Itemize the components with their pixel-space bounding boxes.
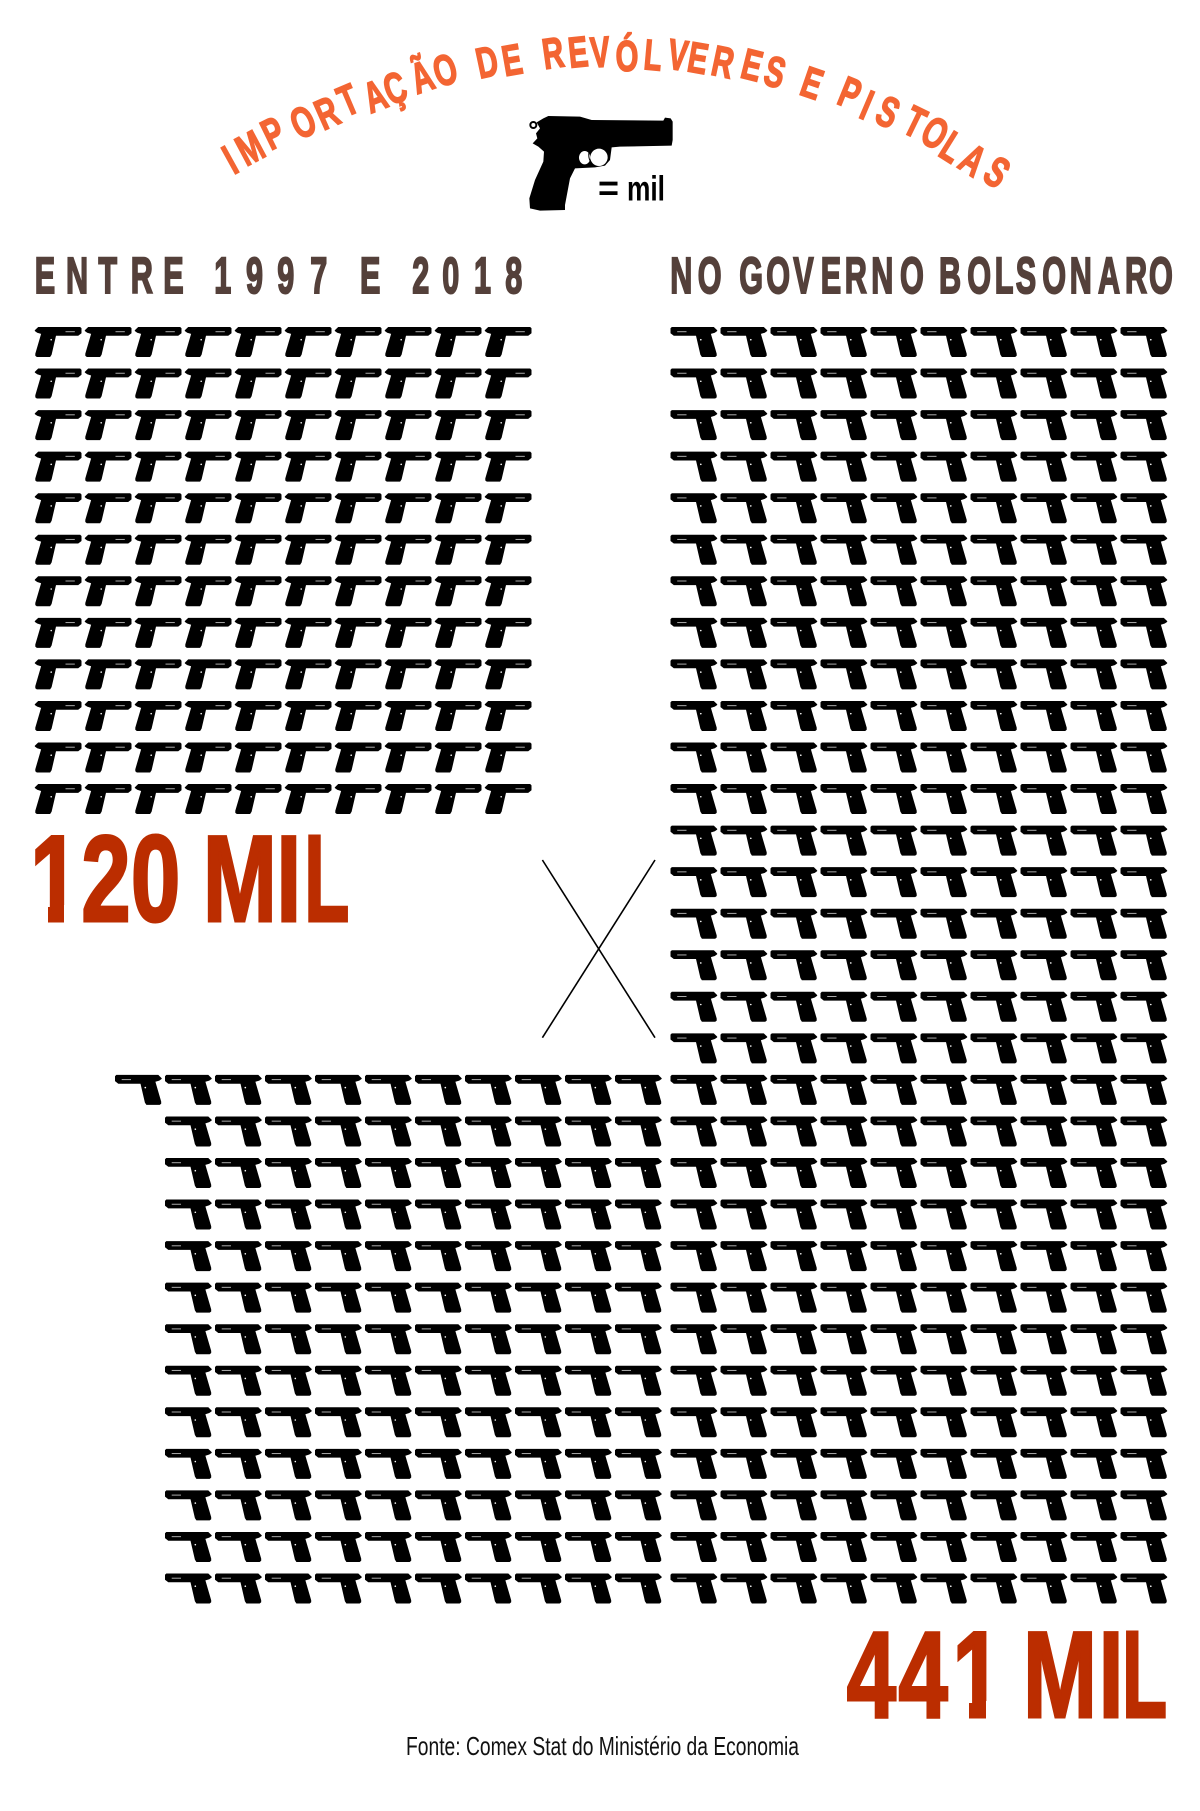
- title: curved heading: I: [854, 82, 880, 129]
- title: curved heading: I: [215, 137, 245, 183]
- title: curved heading: A: [357, 70, 394, 122]
- title: curved heading: R: [708, 37, 738, 88]
- title: curved heading: A: [951, 134, 995, 186]
- title: curved heading: E: [684, 33, 712, 83]
- title: curved heading: T: [896, 97, 934, 148]
- pictogram: 441 mil guns, Bolsonaro government, right column: [670, 327, 1167, 1604]
- title: curved heading: [215, 27, 1018, 197]
- title: curved heading: R: [308, 87, 346, 139]
- title: curved heading: Ã: [404, 50, 440, 103]
- title: curved heading: L: [642, 31, 664, 80]
- value: 441 mil: [847, 1630, 1166, 1719]
- icon: pistol legend: [529, 116, 673, 211]
- title: curved heading: R: [539, 28, 567, 78]
- title: curved heading: Ç: [377, 62, 413, 114]
- title: curved heading: Ó: [615, 31, 639, 80]
- title: curved heading: D: [472, 37, 502, 88]
- legend label: = mil: mil: [627, 170, 665, 208]
- value: 120 mil: L: [304, 811, 349, 948]
- value: 441 mil: MI: [1023, 1606, 1123, 1743]
- value: 120 mil: [35, 834, 348, 924]
- title: curved heading: E: [737, 40, 767, 91]
- title: curved heading: V: [589, 28, 612, 77]
- title: curved heading: E: [795, 57, 829, 109]
- value: 441 mil: 44: [847, 1606, 948, 1743]
- title: curved heading: S: [975, 147, 1018, 197]
- legend label: = mil: [598, 169, 665, 208]
- source note: Fonte: Comex Stat do Ministério da Economia: [406, 1731, 799, 1761]
- title: curved heading: S: [759, 46, 791, 98]
- title: curved heading: O: [283, 96, 324, 149]
- title: curved heading: P: [254, 107, 292, 159]
- value: 120 mil: 20MI: [81, 810, 301, 947]
- title: curved heading: V: [665, 30, 691, 80]
- heading: no governo bolsonaro: NOGOVERNOBOLSONARO: [670, 247, 1173, 304]
- heading: entre 1997 e 2018: ENTRE1997E2018: [35, 247, 522, 304]
- legend label: = mil: =: [598, 169, 619, 208]
- title: curved heading: O: [427, 44, 463, 96]
- title: curved heading: E: [498, 35, 526, 85]
- pictogram: 120 mil guns, 1997-2018: [35, 327, 532, 814]
- title: curved heading: E: [566, 27, 590, 77]
- title: curved heading: P: [832, 67, 868, 119]
- pictogram: 441 mil guns, bottom extension: [115, 1075, 662, 1604]
- versus X mark: [542, 860, 655, 1038]
- title: curved heading: T: [330, 74, 366, 126]
- value: 441 mil: L: [1122, 1607, 1167, 1744]
- title: curved heading: S: [869, 86, 907, 138]
- title: curved heading: O: [913, 107, 956, 160]
- value: 120 mil: 1: [30, 810, 79, 947]
- value: 441 mil: 1: [953, 1606, 1002, 1743]
- title: curved heading: M: [228, 121, 272, 175]
- title: curved heading: L: [932, 122, 972, 172]
